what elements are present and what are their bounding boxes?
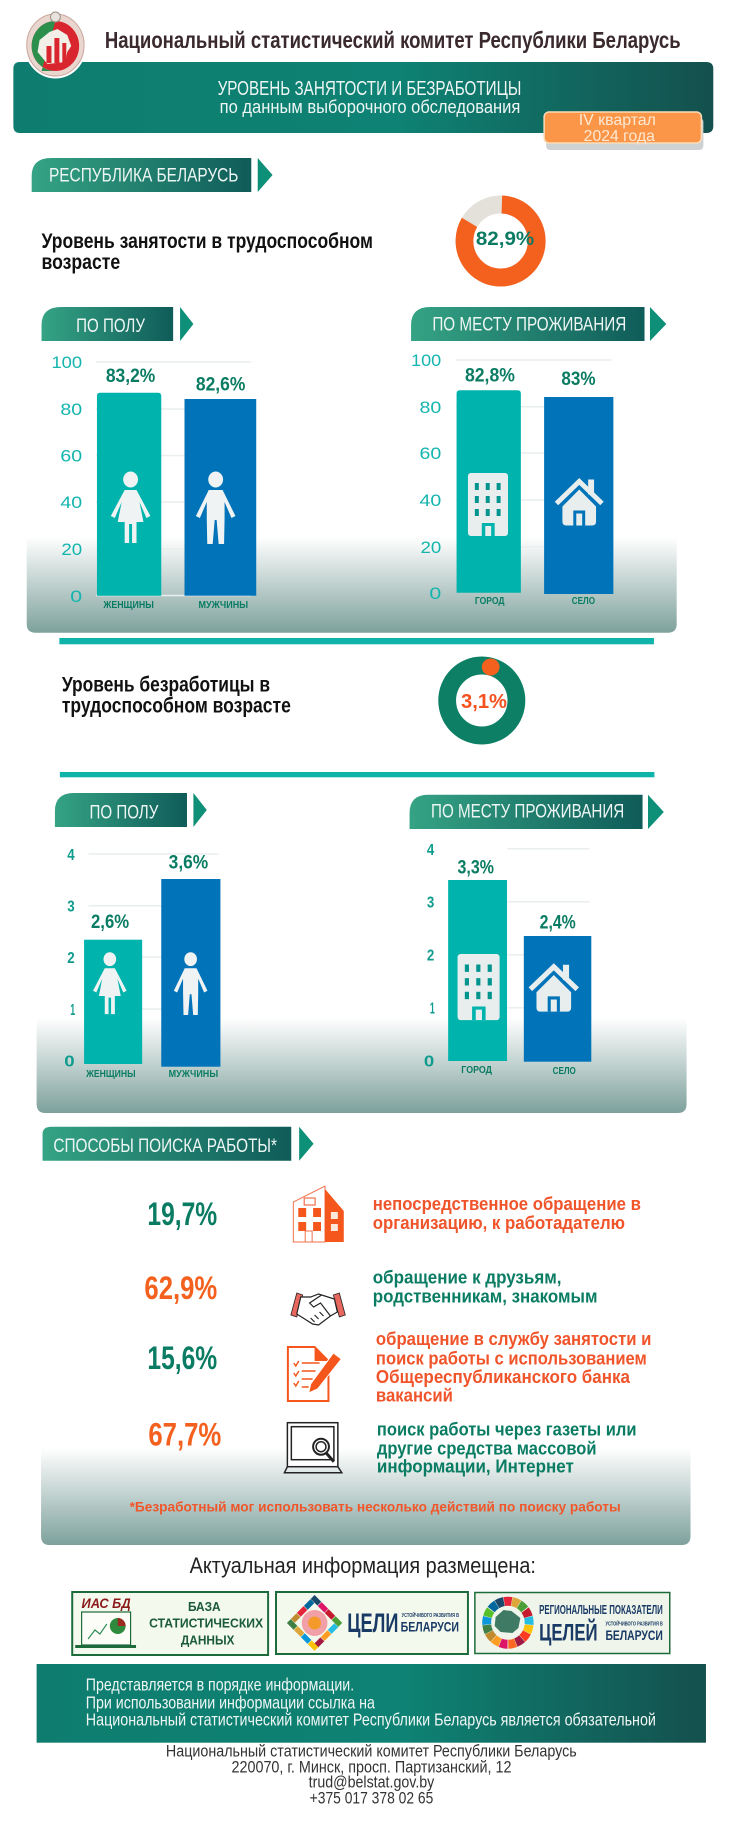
- bar chart: employment by residence: 40: [419, 491, 441, 510]
- bar chart: unemployment by sex: 2,6%: [91, 912, 129, 933]
- title banner: [13, 62, 713, 133]
- icon: checklist with pen: [288, 1347, 341, 1401]
- section tag: by residence: [410, 795, 664, 829]
- bar: city 82.8: [457, 390, 521, 593]
- logo: statistics committee emblem: [24, 12, 87, 78]
- method 2: friends and relatives: обращение к друзьям,: [373, 1266, 562, 1287]
- method 3: employment service: поиск работы с использованием: [376, 1347, 647, 1368]
- icon: SDG diamond: [287, 1595, 342, 1651]
- bar chart: employment by residence: 80: [419, 398, 441, 417]
- method 1: direct application: [147, 1186, 641, 1242]
- bar chart: unemployment by residence: 4: [427, 842, 434, 859]
- banner title: УРОВЕНЬ ЗАНЯТОСТИ И БЕЗРАБОТИЦЫ: [218, 78, 521, 100]
- method 3: employment service: обращение в службу занятости и: [376, 1328, 651, 1349]
- footer: contacts: trud@belstat.gov.by: [309, 1773, 435, 1792]
- bar chart: unemployment by residence: 2,4%: [540, 912, 576, 933]
- method 4: media and internet: информации, Интернет: [377, 1456, 574, 1477]
- bar: men 82.6: [185, 399, 256, 596]
- donut chart: unemployment 3.1%: 3,1%: [461, 691, 507, 713]
- resource card: statistics database: [72, 1592, 268, 1655]
- resource card: statistics database: БАЗА: [188, 1599, 221, 1614]
- donut chart: employment 82.9%: 82,9%: [476, 229, 534, 250]
- bar chart: unemployment by sex: ЖЕНЩИНЫ: [85, 1069, 136, 1080]
- method 2: friends and relatives: 62,9%: [144, 1270, 217, 1306]
- bar chart: employment by sex: 20: [61, 540, 82, 559]
- bar chart: employment by sex: МУЖЧИНЫ: [199, 600, 248, 611]
- bar chart: unemployment by residence: 1: [430, 1000, 435, 1018]
- footnote: *Безработный мог использовать несколько действий по поиску работы: [130, 1498, 621, 1515]
- gradient panel: job search: [41, 1448, 691, 1545]
- bar: women 2.6: [84, 940, 142, 1064]
- bar: village 83: [544, 397, 613, 594]
- icon: woman: [93, 952, 127, 1014]
- section tag: Республика Беларусь: РЕСПУБЛИКА БЕЛАРУСЬ: [49, 165, 238, 187]
- quarter badge: [544, 112, 703, 150]
- section tag: by sex: ПО ПОЛУ: [90, 802, 159, 824]
- bar chart: unemployment by sex: 4: [67, 847, 75, 864]
- bar chart: employment by residence: [411, 351, 613, 607]
- resource card: SDG Belarus: [276, 1592, 468, 1654]
- donut chart: employment 82.9%: [463, 203, 538, 279]
- bar chart: unemployment by residence: 3,3%: [458, 857, 494, 878]
- icon: man: [174, 952, 207, 1015]
- bar chart: employment by sex: 82,6%: [196, 374, 246, 396]
- quarter badge: IV квартал: [579, 112, 656, 129]
- bar chart: unemployment by residence: 0: [424, 1053, 434, 1071]
- bar chart: unemployment by residence: 3: [427, 894, 434, 912]
- method 3: employment service: 15,6%: [147, 1340, 217, 1376]
- section tag: by sex: ПО ПОЛУ: [76, 316, 146, 337]
- bar chart: employment by residence: ГОРОД: [475, 596, 505, 607]
- section tag: by residence: [411, 307, 666, 341]
- method 3: employment service: Общереспубликанского банка: [376, 1366, 631, 1387]
- bar chart: employment by residence: 82,8%: [465, 365, 515, 387]
- bar chart: unemployment by sex: МУЖЧИНЫ: [169, 1069, 218, 1080]
- icon: building: [468, 473, 508, 536]
- bar chart: employment by residence: 60: [419, 444, 441, 463]
- icon: screen with chart: [75, 1612, 136, 1648]
- bar chart: unemployment by sex: 3: [67, 898, 75, 916]
- bar chart: employment by sex: 40: [60, 493, 82, 512]
- method 4: media and internet: 67,7%: [148, 1417, 221, 1453]
- icon: woman: [111, 472, 150, 543]
- donut chart: unemployment 3.1%: [447, 658, 516, 736]
- bar chart: employment by residence: СЕЛО: [572, 596, 595, 607]
- icon: building: [458, 954, 500, 1020]
- bar chart: unemployment by residence: СЕЛО: [553, 1066, 576, 1077]
- method 4: media and internet: другие средства массовой: [377, 1437, 597, 1458]
- resource card: statistics database: СТАТИСТИЧЕСКИХ: [149, 1616, 264, 1631]
- bar chart: unemployment by sex: 2: [67, 950, 75, 967]
- bar chart: unemployment by sex: 3,6%: [169, 852, 208, 874]
- heading: resources: Актуальная информация размещена:: [190, 1553, 536, 1578]
- method 1: direct application: организацию, к работадателю: [373, 1212, 625, 1233]
- bar chart: employment by sex: 60: [60, 446, 82, 466]
- method 2: friends and relatives: родственникам, знакомым: [373, 1285, 598, 1306]
- heading: employment level: Уровень занятости в трудоспособном: [42, 230, 373, 253]
- heading: employment level: возрасте: [42, 251, 120, 274]
- bar chart: unemployment by residence: [424, 842, 591, 1077]
- bar chart: employment by sex: ЖЕНЩИНЫ: [102, 600, 154, 611]
- heading: unemployment level: [62, 673, 291, 718]
- icon: SDG ring with map: [478, 1592, 538, 1653]
- resource card: SDG Belarus: БЕЛАРУСИ: [401, 1619, 459, 1635]
- bar chart: employment by sex: 100: [51, 353, 82, 372]
- icon: man: [196, 472, 235, 544]
- icon: laptop with magnifier: [284, 1423, 342, 1473]
- gradient panel: unemployment charts: [37, 1018, 687, 1113]
- method 1: direct application: 19,7%: [147, 1196, 217, 1232]
- bar chart: unemployment by sex: [64, 847, 220, 1080]
- bar chart: unemployment by sex: 0: [64, 1053, 75, 1071]
- footer: contacts: Национальный статистический комитет Республики Беларусь: [166, 1742, 577, 1761]
- footer: contacts: [166, 1742, 577, 1807]
- bar chart: employment by residence: 20: [420, 538, 441, 557]
- banner subtitle: по данным выборочного обследования: [220, 96, 520, 117]
- bar chart: employment by residence: 83%: [561, 369, 596, 390]
- bar chart: employment by residence: 100: [411, 351, 441, 370]
- heading: employment level: [42, 230, 373, 274]
- heading: unemployment level: Уровень безработицы в: [62, 673, 270, 697]
- resource card: statistics database: ДАННЫХ: [181, 1632, 235, 1647]
- section tag: by residence: ПО МЕСТУ ПРОЖИВАНИЯ: [432, 314, 626, 336]
- bar chart: employment by sex: 0: [70, 587, 82, 606]
- icon: handshake: [291, 1293, 345, 1325]
- divider: [60, 772, 654, 777]
- section tag: by residence: ПО МЕСТУ ПРОЖИВАНИЯ: [431, 801, 624, 823]
- heading: unemployment level: трудоспособном возрасте: [62, 694, 291, 718]
- method 4: media and internet: [148, 1417, 637, 1477]
- quarter badge: 2024 года: [584, 128, 655, 145]
- resource card: regional SDG indicators: БЕЛАРУСИ: [605, 1627, 663, 1643]
- method 4: media and internet: поиск работы через газеты или: [377, 1419, 637, 1440]
- bar chart: employment by residence: 0: [429, 584, 441, 603]
- section tag: by sex: [42, 307, 193, 341]
- footer: contacts: +375 017 378 02 65: [310, 1788, 433, 1807]
- resource card: regional SDG indicators: [475, 1592, 670, 1654]
- bar: city 3.3: [448, 880, 507, 1061]
- bar chart: unemployment by residence: ГОРОД: [461, 1065, 492, 1076]
- bar: village 2.4: [524, 936, 591, 1062]
- gradient panel: employment charts: [27, 537, 677, 633]
- resource card: regional SDG indicators: УСТОЙЧИВОГО РАЗВИТИЯ В: [605, 1620, 663, 1628]
- section tag: Республика Беларусь: [32, 158, 273, 192]
- notice banner: При использовании информации ссылка на: [86, 1692, 375, 1712]
- footer: contacts: 220070, г. Минск, просп. Партизанский, 12: [231, 1757, 511, 1776]
- icon: house: [530, 965, 577, 1012]
- bar: women 83.2: [97, 393, 161, 596]
- bar: men 3.6: [161, 879, 220, 1067]
- resource card: regional SDG indicators: ЦЕЛЕЙ: [539, 1619, 598, 1647]
- method 1: direct application: непосредственное обращение в: [373, 1193, 641, 1214]
- method 3: employment service: [147, 1328, 651, 1406]
- section tag: by sex: [55, 793, 207, 827]
- bar chart: employment by sex: [51, 353, 256, 611]
- resource card: statistics database: ИАС БД: [82, 1595, 131, 1611]
- method 3: employment service: вакансий: [376, 1385, 453, 1406]
- notice banner: [37, 1664, 706, 1743]
- bar chart: employment by sex: 80: [60, 400, 82, 419]
- section tag: job search methods: [43, 1127, 314, 1161]
- bar chart: unemployment by residence: 2: [427, 947, 434, 965]
- method 2: friends and relatives: [144, 1266, 598, 1325]
- resource card: SDG Belarus: ЦЕЛИ: [347, 1608, 398, 1638]
- bar chart: employment by sex: 83,2%: [106, 366, 156, 387]
- bar chart: unemployment by sex: 1: [70, 1002, 75, 1019]
- icon: office building: [293, 1186, 344, 1242]
- divider: [59, 638, 654, 644]
- icon: house: [556, 480, 602, 526]
- notice banner: Представляется в порядке информации.: [86, 1675, 354, 1695]
- resource card: SDG Belarus: УСТОЙЧИВОГО РАЗВИТИЯ В: [402, 1611, 459, 1619]
- section tag: job search methods: СПОСОБЫ ПОИСКА РАБОТЫ*: [53, 1136, 278, 1157]
